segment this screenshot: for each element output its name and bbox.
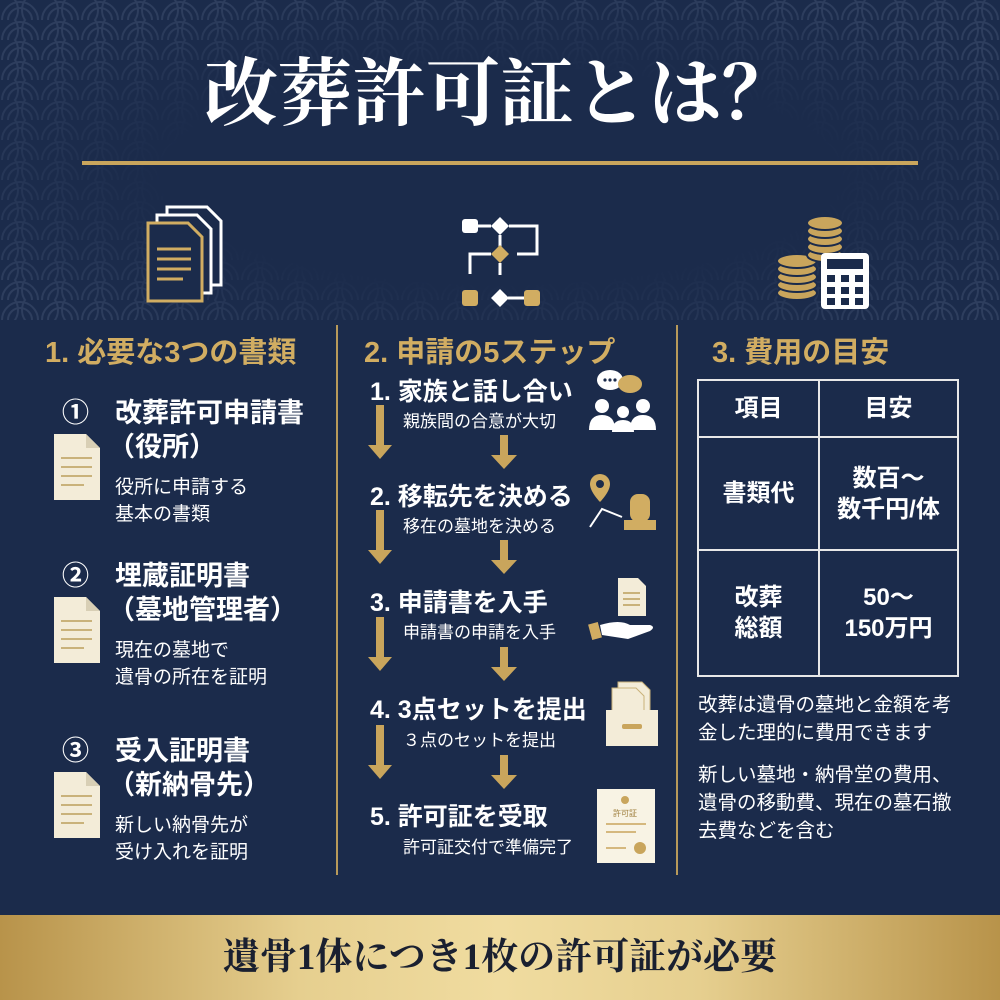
step 4: 4. 3点セットを提出 <box>370 696 587 724</box>
item 1: （役所） <box>108 432 216 462</box>
heading 1: 1. 必要な3つの書類 <box>45 337 296 369</box>
step 3: 3. 申請書を入手 <box>370 589 548 617</box>
cost table: 150万円 <box>844 615 933 642</box>
icon: map pin and grave <box>589 474 656 530</box>
bottom banner <box>0 915 1000 1000</box>
item 3 <box>54 736 270 863</box>
item 1: 役所に申請する <box>115 477 248 498</box>
step 2: 2. 移転先を決める <box>370 483 573 511</box>
icon: certificate <box>597 789 655 863</box>
item 2: 遺骨の所在を証明 <box>115 667 267 688</box>
item 1: 改葬許可申請書 <box>115 398 304 428</box>
step 5: 5. 許可証を受取 <box>370 803 548 831</box>
item 3: 新しい納骨先が <box>115 815 248 836</box>
item 3: （新納骨先） <box>108 770 270 800</box>
cost table: 項目 <box>734 395 782 422</box>
panel: costs: 遺骨の移動費、現在の墓石撤 <box>698 792 952 814</box>
panel: steps: ３点のセットを提出 <box>403 731 556 750</box>
icon: flowchart <box>462 217 540 307</box>
heading 2: 2. 申請の5ステップ <box>364 337 615 369</box>
cost table: 書類代 <box>722 480 794 507</box>
panel: costs: 新しい墓地・納骨堂の費用、 <box>698 764 952 786</box>
cost table: 数千円/体 <box>837 496 940 522</box>
bottom banner: 遺骨1体につき1枚の許可証が必要 <box>223 937 777 978</box>
panel: costs: 去費などを含む <box>698 820 835 842</box>
item 1 <box>54 398 304 525</box>
item 3: 受け入れを証明 <box>115 842 248 863</box>
note text <box>698 694 952 744</box>
panel: steps: 親族間の合意が大切 <box>403 412 556 431</box>
background pattern <box>1 0 999 320</box>
item 1: ① <box>62 398 89 428</box>
cost table: 改葬 <box>734 584 782 611</box>
panel: steps <box>364 337 658 863</box>
item 2: ② <box>62 561 89 591</box>
item 3: 受入証明書 <box>115 736 250 766</box>
note text: 改葬は遺骨の墓地と金額を考 <box>698 694 952 716</box>
icon: coins and calculator <box>776 217 869 309</box>
panel: steps: 移在の墓地を決める <box>403 517 556 536</box>
item 3: ③ <box>62 736 89 766</box>
arrows <box>368 405 517 789</box>
cost table <box>697 379 959 677</box>
cost table: 目安 <box>864 395 912 422</box>
note text: 金した理的に費用できます <box>698 722 932 744</box>
panel: steps: 許可証交付で準備完了 <box>403 838 573 857</box>
icon: box with documents <box>606 682 658 746</box>
panel: steps: 申請書の申請を入手 <box>403 623 556 642</box>
panel: documents <box>45 337 304 863</box>
item 1: 基本の書類 <box>115 504 210 525</box>
cost table: 50〜 <box>863 584 914 611</box>
item 2: 埋蔵証明書 <box>115 561 250 591</box>
title: 改葬許可証とは？ <box>204 54 796 136</box>
icon: hand with document <box>588 578 653 640</box>
heading 3: 3. 費用の目安 <box>712 337 889 369</box>
icon: certificate: 許可証 <box>613 808 637 819</box>
item 2 <box>54 561 297 688</box>
cost table: 総額 <box>734 615 782 642</box>
panel: costs <box>697 337 959 842</box>
item 2: （墓地管理者） <box>108 595 297 625</box>
cost table: 数百〜 <box>852 464 924 492</box>
step 1: 1. 家族と話し合い <box>370 378 573 406</box>
icon: people <box>589 370 656 432</box>
item 2: 現在の墓地で <box>115 640 229 661</box>
icon: documents <box>146 206 222 302</box>
